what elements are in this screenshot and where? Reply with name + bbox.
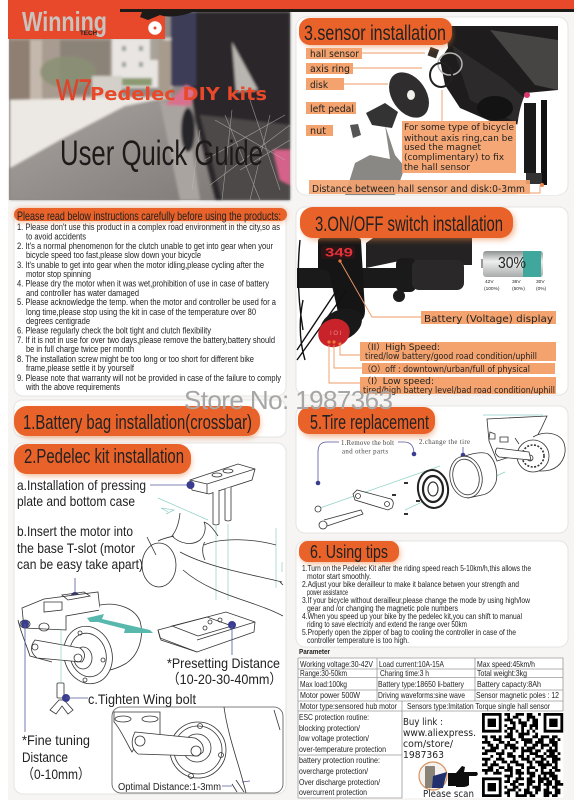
panel: battery bag installation: [14, 400, 286, 438]
instruction list: and controller has water damaged: [26, 288, 139, 299]
tire ring: [446, 453, 497, 501]
panel: using tips: [296, 541, 568, 647]
instruction list: motor stop spinning: [26, 269, 91, 280]
battery gauge: 36V: [512, 279, 521, 285]
sensor photo: [345, 26, 558, 195]
inset: optimal distance detail: Optimal Distance:1-3mm: [118, 782, 221, 793]
heading pill: 3.sensor installation: [304, 22, 446, 45]
heading pill: [300, 207, 515, 240]
instruction list: with the above requirements: [25, 382, 120, 393]
parameter table: Working voltage:30-42V: [300, 659, 373, 669]
step b text: the base T-slot (motor: [17, 540, 135, 556]
instruction list: be in full charge twice per month: [26, 344, 134, 355]
step labels: [341, 439, 470, 456]
buy link text: [403, 717, 476, 761]
heading pill: Please read below instructions carefully before using the products:: [17, 209, 281, 223]
icon: phone in circle: [419, 762, 447, 790]
heading pill: 1.Battery bag installation(crossbar): [23, 412, 252, 434]
parameter table: battery protection routine:: [299, 755, 380, 765]
arrow: insert motor: [87, 614, 153, 633]
callout: distance: [309, 180, 544, 195]
step a text: [17, 477, 146, 509]
parameter table: [298, 658, 563, 798]
panel: tire replacement: [296, 406, 568, 533]
parameter table: Max speed:45km/h: [477, 659, 535, 669]
tips list: controller temperature is too high.: [307, 635, 409, 645]
parameter table: low voltage protection/: [299, 733, 370, 743]
heading pill: 3.ON/OFF switch installation: [315, 213, 503, 236]
tips list: riding to save electricity and extend the range over 50km: [307, 619, 467, 629]
watermark: store number: Store No: 1987363: [184, 385, 393, 415]
label: off: （O）off : downtown/urban/full of physical: [363, 364, 530, 374]
instruction list: [17, 222, 281, 393]
tips list: motor start smoothly.: [307, 571, 371, 581]
instruction list: 5. Please acknowledge the temp. when the motor and controller be used for a: [17, 297, 277, 308]
handlebar photo: I O I: [330, 331, 342, 337]
icon: pointing hand: [448, 766, 478, 787]
hub disk: [416, 468, 450, 510]
top band: [8, 0, 574, 39]
parameter table: Load current:10A-15A: [379, 659, 444, 669]
step labels: and other parts: [342, 448, 388, 456]
step a text: plate and bottom case: [17, 493, 135, 509]
tips list: [302, 563, 531, 645]
fine tuning label: Distance: [22, 749, 68, 765]
panel: cover photo: [9, 12, 290, 200]
instruction list: bicycle speed too fast,please slow down your bicycle: [26, 250, 201, 261]
battery gauge: (0%): [536, 286, 547, 292]
presetting distance label: *Presetting Distance: [167, 655, 280, 671]
parameter table: overcurrent protection: [299, 787, 367, 797]
battery gauge: (100%): [484, 286, 500, 292]
callout: magnet note: [402, 121, 516, 173]
step c label: c.Tighten Wing bolt: [88, 691, 196, 707]
label: disk: [306, 78, 344, 91]
instruction list: degrees centigrade: [26, 316, 90, 327]
logo: TECH: [80, 31, 97, 37]
parameter table: Range:30-50km: [300, 668, 347, 678]
label: high speed: [360, 342, 556, 361]
buy link text: www.aliexpress.: [403, 728, 476, 739]
fine tuning label: [22, 732, 90, 782]
panel: pedelec kit installation: [14, 443, 286, 794]
label: nut: [306, 125, 333, 137]
leader lines and dots: [316, 442, 465, 485]
disk: [381, 65, 437, 125]
instruction list: 4. Please dry the motor when it was wet,prohibition of use in case of battery: [17, 278, 269, 290]
instruction list: frame,please settle it by yourself: [26, 363, 134, 374]
logo: Winning: [22, 6, 107, 37]
parameter table: Motor type:sensored hub motor: [300, 701, 397, 711]
battery gauge: 30%: [498, 255, 526, 272]
instruction list: long time,please stop using the kit in case of the temperature over 80: [26, 307, 256, 318]
parameter table: Over discharge protection/: [299, 777, 381, 787]
step b text: can be easy take apart): [17, 556, 143, 572]
callout: magnet note: without axis ring,can be: [404, 134, 513, 144]
instruction list: 6. Please regularly check the bolt tight and clutch flexibility: [17, 326, 211, 336]
step b text: b.Insert the motor into: [17, 523, 133, 539]
exploded tire parts drawing: [315, 415, 565, 529]
parameter table: Driving waveforms:sine wave: [378, 690, 465, 700]
heading: parameter: Parameter: [299, 647, 330, 656]
bicycle frame drawing: [71, 498, 283, 616]
label: nut: nut: [310, 126, 326, 137]
handlebar photo: [297, 233, 472, 360]
motor assembly: [487, 416, 565, 472]
heading: W7 Pedelec DIY kits: W7: [56, 74, 92, 107]
tips list: power assistance: [307, 587, 348, 597]
label: low speed: （I）Low speed:: [362, 376, 434, 386]
arm and bolts: [315, 482, 420, 529]
instruction list: 3. It's unable to get into gear when the motor idling,please cycling after the: [17, 260, 264, 271]
voltage readout: 349: [325, 246, 353, 260]
instruction list: 8. The installation screw might be too long or too short for different bike: [17, 354, 254, 365]
heading pill: [299, 18, 452, 47]
callout: distance: Distance between hall sensor and disk:0-3mm: [312, 184, 525, 195]
label: hall sensor: hall sensor: [310, 49, 359, 60]
label: low speed: tired/high battery level/bad road condition/uphill: [363, 385, 555, 395]
parameter table: Battery capacty:8Ah: [477, 679, 541, 689]
instruction list: 2. It's a normal phenomenon for the clutch unable to get into gear when your: [17, 241, 274, 252]
parameter table: Charing time:3 h: [380, 668, 429, 678]
QR code: [482, 713, 563, 797]
wing bolt icon: [50, 683, 88, 714]
step a text: a.Installation of pressing: [17, 477, 146, 493]
heading pill: 2.Pedelec kit installation: [24, 446, 184, 468]
fine tuning label: *Fine tuning: [22, 732, 90, 748]
pedal: [345, 103, 405, 195]
label: left pedal: left pedal: [310, 104, 354, 115]
heading pill: [298, 407, 435, 437]
parameter table: Battery type:18650 li-battery: [378, 679, 465, 689]
battery gauge: 30V: [536, 279, 545, 285]
please scan caption: Please scan: [423, 789, 474, 800]
heading pill: 5.Tire replacement: [310, 412, 429, 434]
presetting distance label: [167, 655, 282, 687]
label: low speed: [360, 376, 556, 395]
label: battery voltage display: Battery (Voltage) display: [424, 314, 553, 325]
heading: W7 Pedelec DIY kits: Pedelec DIY kits: [90, 84, 267, 105]
step b text: [17, 523, 143, 572]
instruction list: 9. Please note that warranty will not be provided in case of the failure to comply: [17, 373, 281, 384]
tips list: 2.Adjust your bike derailleur to make it balance betwen your strength and: [302, 579, 519, 589]
step labels: 1.Remove the bolt: [341, 440, 394, 447]
battery gauge: (50%): [512, 286, 525, 292]
base plate drawing: [158, 612, 255, 655]
buy link text: 1987363: [403, 750, 444, 761]
tips list: gear and /or changing the magnetic pole numbers: [307, 603, 458, 613]
label: axis ring: axis ring: [310, 64, 350, 75]
heading pill: 6. Using tips: [310, 542, 388, 562]
presetting distance label: （10-20-30-40mm）: [167, 671, 282, 687]
parameter table: over-temperature protection: [299, 744, 386, 754]
parameter table: Max load:100kg: [300, 679, 347, 689]
parameter table: Total weight:3kg: [477, 668, 527, 678]
callout: magnet note: used the magnet: [404, 143, 481, 153]
motor assembly drawing: [18, 592, 141, 732]
parameter table: Motor power 500W: [300, 690, 360, 700]
callout: magnet note: the hall sensor: [404, 163, 470, 173]
panel: instructions: [14, 208, 287, 396]
heading: W7 Pedelec DIY kits: [56, 74, 267, 107]
instruction list: 7. If it is not in use for over two days,please remove the battery,battery should: [17, 335, 275, 346]
label: high speed: （II）High Speed:: [362, 342, 440, 352]
heading pill: [14, 406, 260, 438]
buy link text: Buy link :: [403, 717, 443, 728]
callout: magnet note: For some type of bicycle: [404, 123, 514, 133]
title: User Quick Guide: User Quick Guide: [60, 134, 263, 173]
label: high speed: tired/low battery/good road condition/uphill: [365, 351, 537, 361]
step labels: 2.change the tire: [419, 439, 470, 446]
parameter table: ESC protection routine:: [299, 712, 369, 722]
callout: magnet note: (complimentary) to fix: [404, 153, 505, 163]
panel: ON/OFF switch installation: [296, 207, 568, 395]
voltage readout: [321, 246, 355, 260]
inset: optimal distance detail: [112, 707, 283, 793]
instruction list: to avoid accidents: [26, 232, 86, 242]
parameter table: blocking protection/: [299, 723, 361, 733]
label: disk: disk: [310, 80, 328, 91]
tips list: 5.Properly open the zipper of bag to cooling the controller in case of the: [302, 627, 516, 637]
battery gauge: [481, 251, 547, 292]
battery gauge: 42V: [485, 279, 494, 285]
parameter table: overcharge protection/: [299, 766, 369, 776]
buy link text: com/store/: [403, 739, 454, 750]
instruction list: 1. Please don't use this product in a complex road environment in the city,so as: [17, 222, 280, 233]
heading pill: [14, 444, 191, 476]
panel: sensor installation: [296, 17, 568, 195]
fine tuning label: （0-10mm）: [22, 766, 90, 782]
pressing plate drawing: [150, 464, 255, 525]
